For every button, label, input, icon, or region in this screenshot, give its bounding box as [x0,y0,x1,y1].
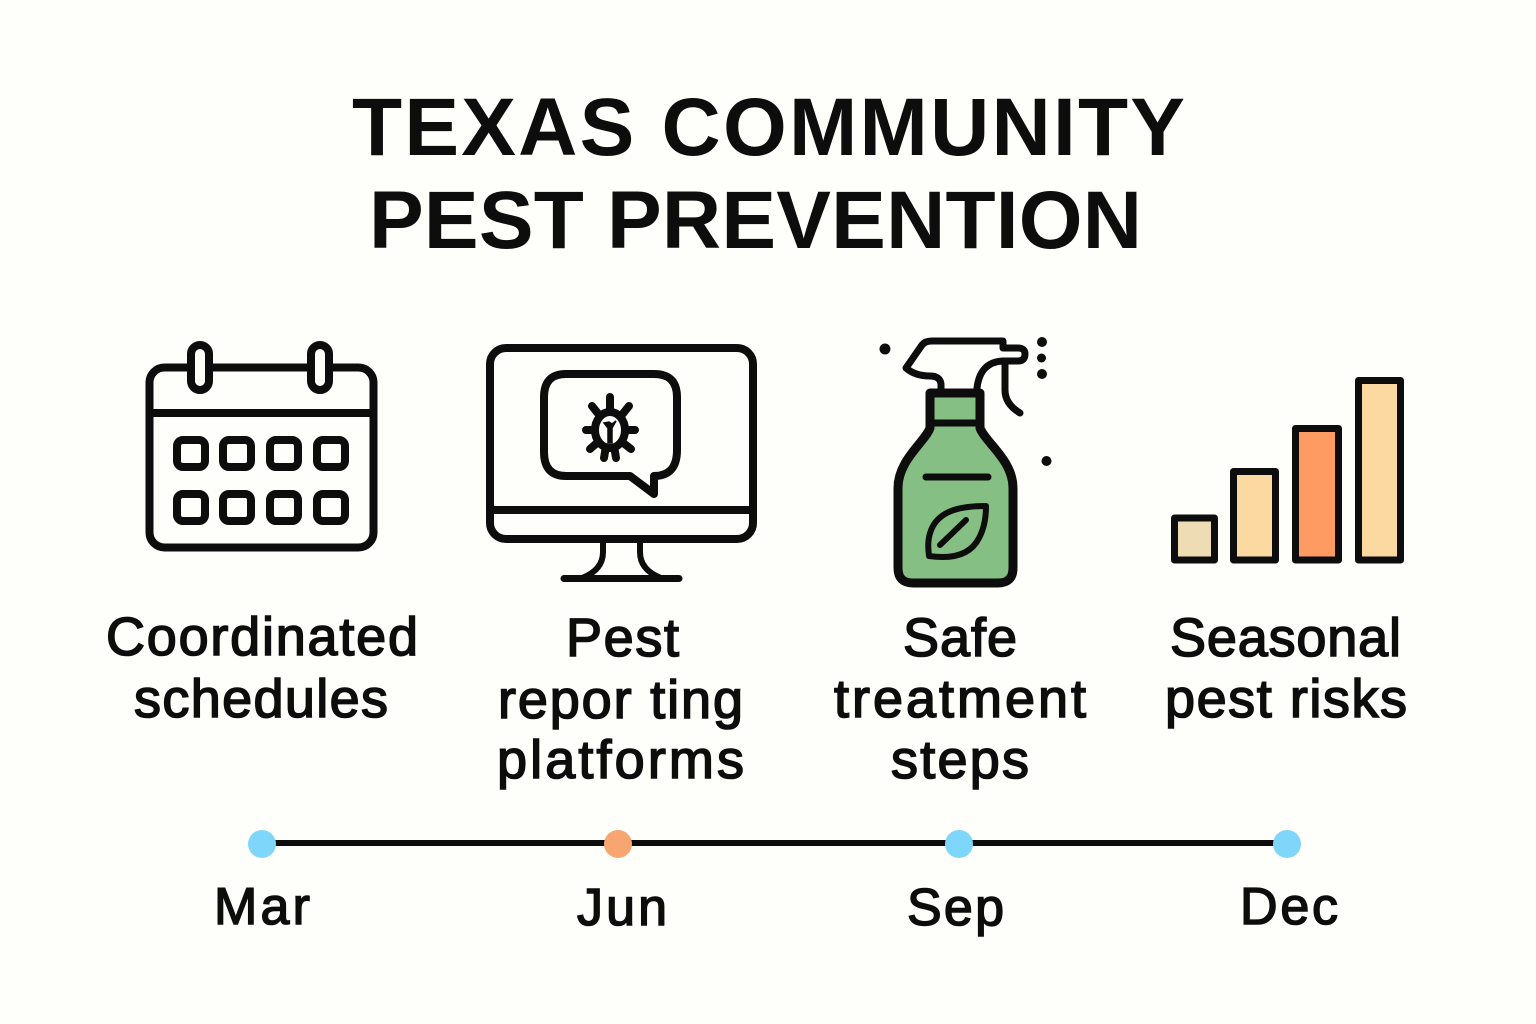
label: coordinated schedules: schedules [134,669,388,729]
title [352,82,1185,266]
marker: Mar [248,830,276,858]
marker: Jun [604,830,632,858]
label: seasonal pest risks: Seasonal [1170,608,1401,668]
label: pest reporting platforms: repor ting [498,670,743,730]
panel: safe treatment steps [834,337,1086,790]
month labels: Dec [1240,878,1338,936]
label: coordinated schedules [106,607,418,729]
label: coordinated schedules: Coordinated [106,607,418,667]
icon: rising bar chart [1174,380,1400,560]
timeline [214,830,1338,937]
icon: calendar [150,345,374,548]
month labels: Jun [577,879,667,937]
label: safe treatment steps [834,608,1086,790]
icon: spray bottle [880,337,1052,583]
label: safe treatment steps: treatment [834,669,1086,729]
label: pest reporting platforms: platforms [497,730,744,790]
panel: pest reporting platforms [490,348,753,790]
title: TEXAS COMMUNITY [352,82,1185,173]
icon: pest in gear [586,397,635,458]
icon: monitor with speech bubble [490,348,753,578]
marker: Sep [945,830,973,858]
month labels: Sep [907,879,1004,937]
marker: Dec [1273,830,1301,858]
label: safe treatment steps: steps [891,730,1029,790]
month labels: Mar [214,878,310,936]
month labels [214,878,1338,937]
panel: coordinated schedules [106,345,418,729]
label: pest reporting platforms [497,608,744,790]
title: PEST PREVENTION [369,175,1142,266]
label: pest reporting platforms: Pest [566,608,679,668]
label: safe treatment steps: Safe [903,608,1017,668]
label: seasonal pest risks: pest risks [1165,669,1407,729]
panel: seasonal pest risks [1165,380,1407,729]
label: seasonal pest risks [1165,608,1407,729]
